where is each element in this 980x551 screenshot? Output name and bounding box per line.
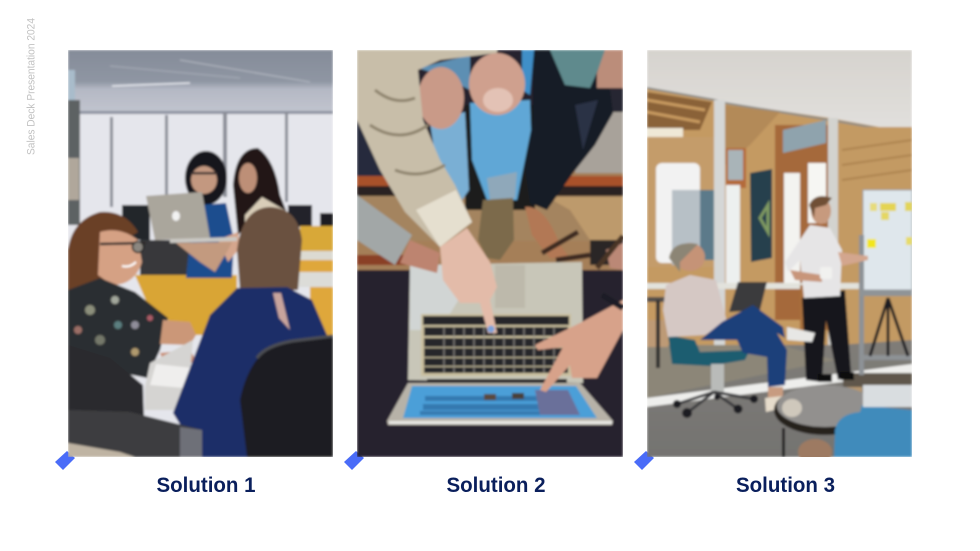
left woman	[68, 212, 138, 290]
photo: presentation in brick office	[647, 50, 912, 465]
left hands	[400, 240, 440, 273]
teal top	[550, 50, 607, 88]
boots and sandals	[478, 198, 514, 260]
blue armchair	[834, 405, 912, 457]
vertical caption: Sales Deck Presentation 2024	[26, 18, 38, 155]
laptop	[146, 192, 210, 240]
ceiling wall	[647, 50, 912, 133]
black leggings	[525, 50, 613, 210]
label: Solution 1: Solution 1	[156, 474, 256, 497]
accent diamond 1	[55, 451, 75, 470]
timber ceiling and glass	[647, 92, 712, 130]
floor	[647, 340, 912, 457]
wood doors	[775, 125, 830, 320]
brick right	[868, 126, 912, 136]
accent diamond 3	[634, 451, 654, 470]
slide canvas	[26, 18, 912, 492]
desk and papers	[145, 340, 193, 410]
jeans	[522, 50, 534, 95]
front right woman	[237, 207, 302, 290]
posts	[714, 100, 725, 385]
laptop on lap	[729, 282, 767, 312]
accent diamond 2	[344, 451, 364, 470]
whiteboard	[863, 190, 912, 290]
cream sweater	[357, 50, 497, 247]
right hand	[535, 300, 623, 392]
photo: office team around laptop	[68, 50, 333, 457]
sitting man	[663, 275, 727, 337]
label: Solution 2: Solution 2	[446, 474, 546, 497]
knees	[418, 67, 464, 129]
chair	[668, 335, 750, 366]
coffee table	[772, 396, 837, 436]
tablet	[387, 383, 613, 425]
foreground chairs and monitor	[68, 360, 146, 418]
rail	[647, 283, 912, 289]
photo: hands pointing at laptop and tablet	[357, 50, 623, 457]
label: Solution 3: Solution 3	[736, 474, 835, 497]
standing man	[802, 290, 851, 382]
rug and bench	[357, 170, 623, 270]
silver laptop	[408, 262, 583, 383]
standing women	[185, 151, 227, 205]
